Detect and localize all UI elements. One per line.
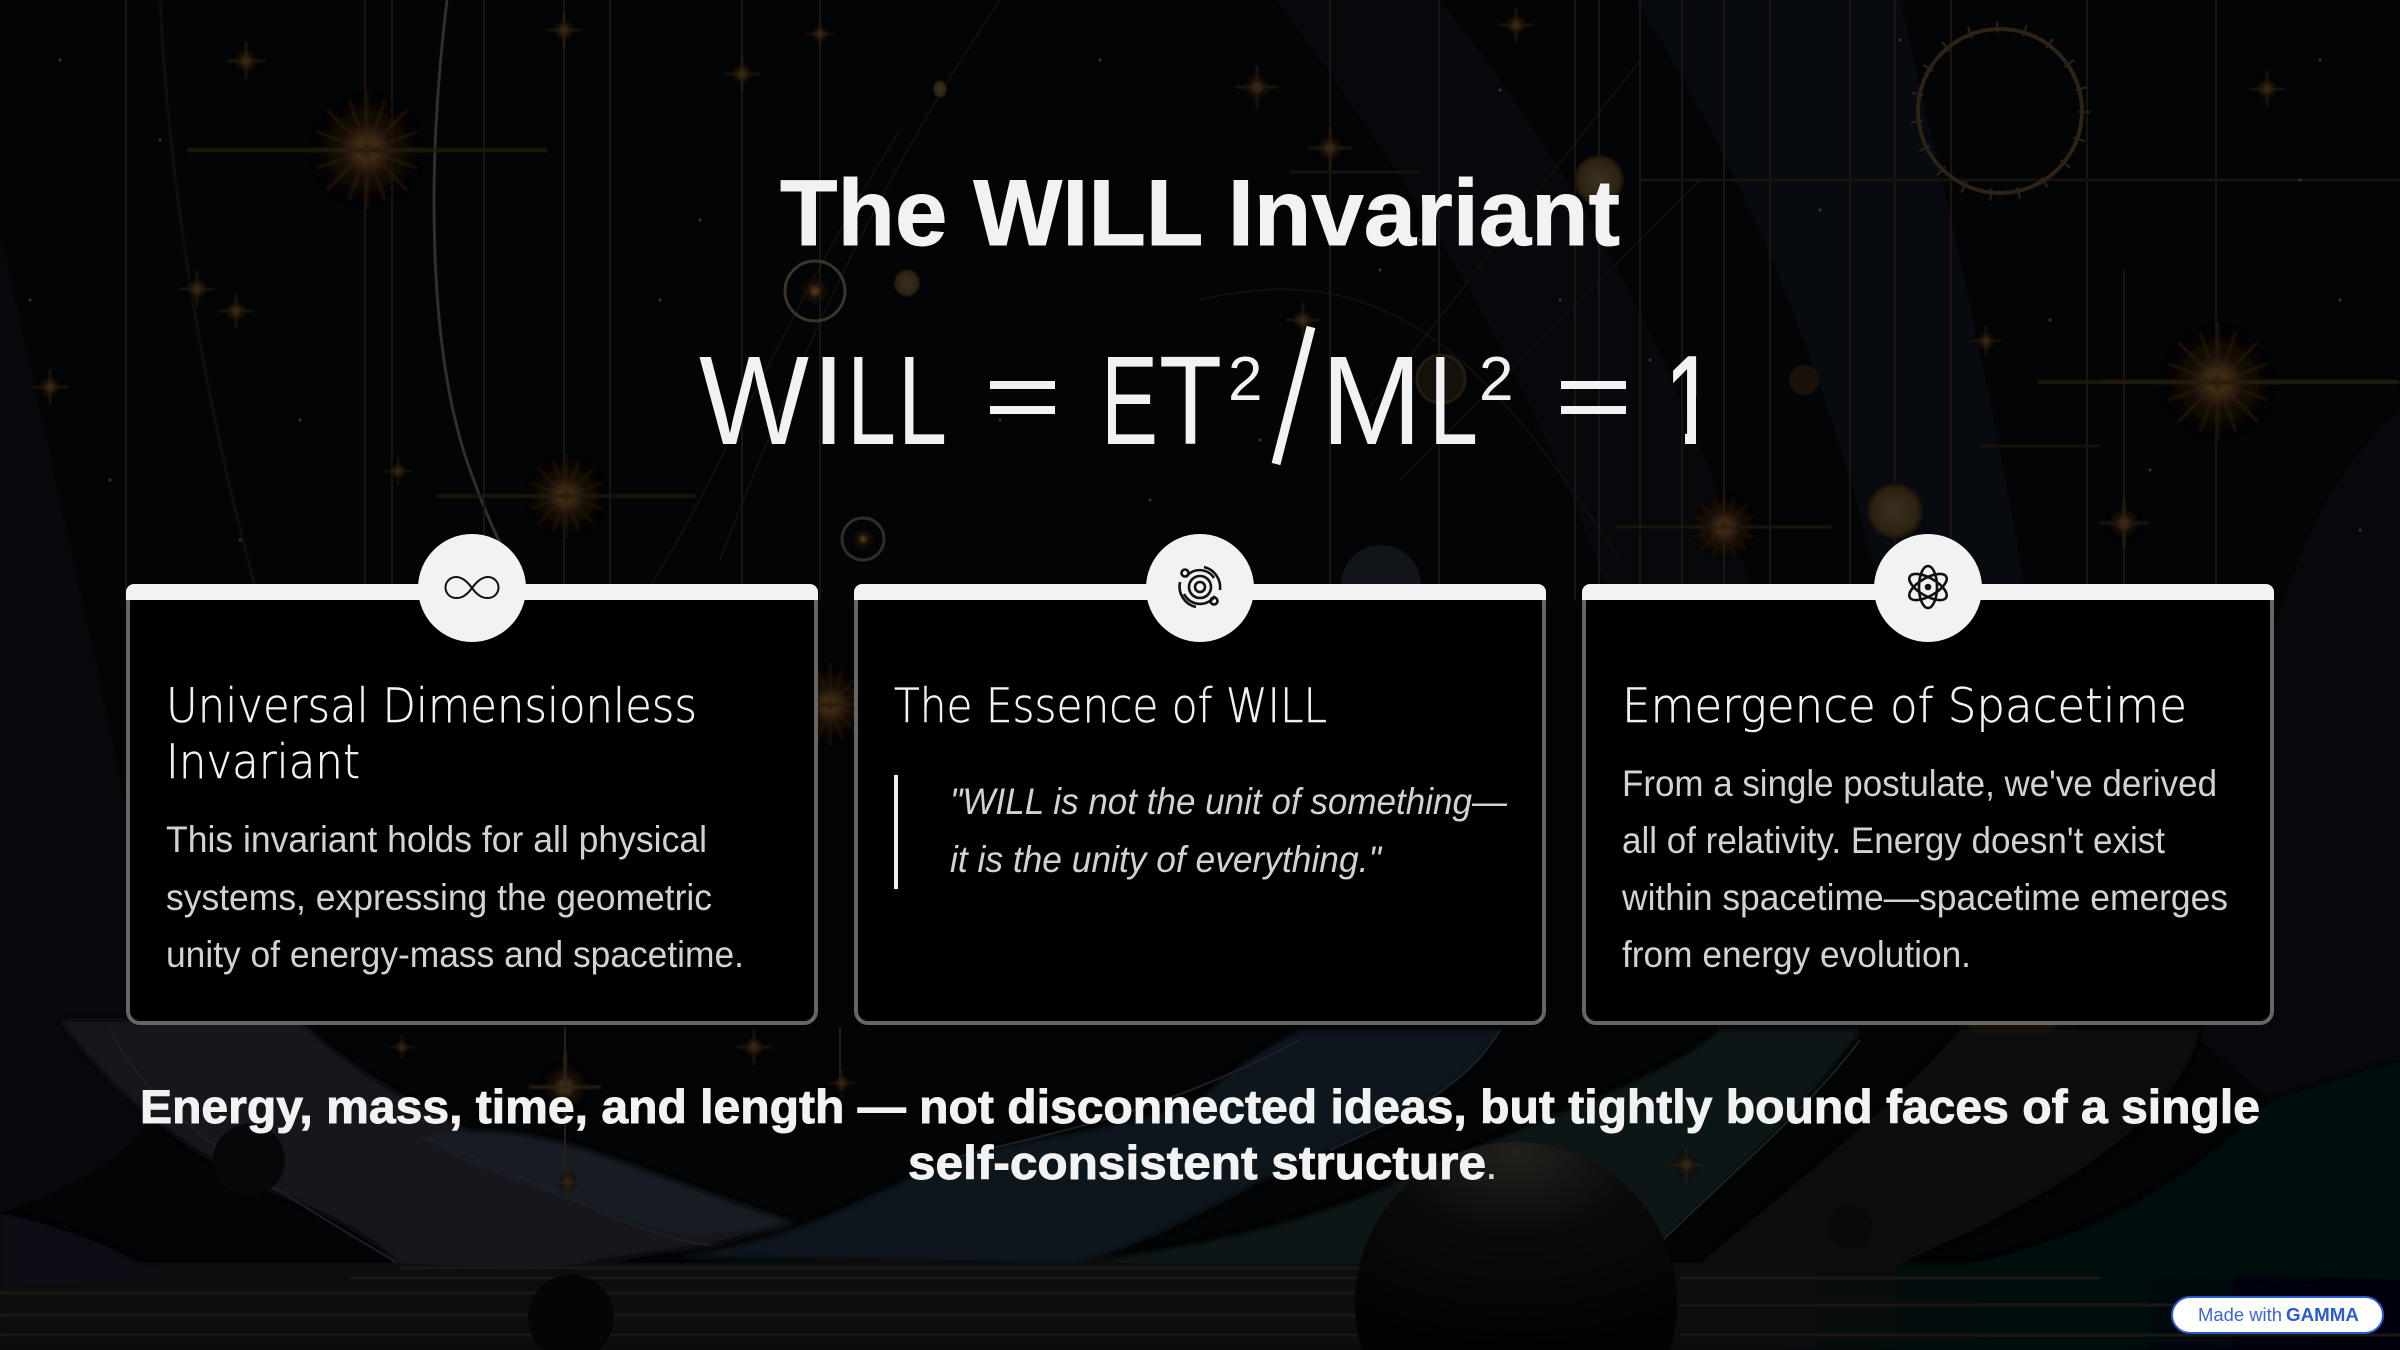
formula: 1 — [1665, 330, 1715, 471]
badge: made with gamma: Made with — [2198, 1305, 2282, 1325]
card body: all of relativity. Energy doesn't exist — [1622, 820, 2166, 861]
card body — [1621, 763, 2228, 975]
distant planet — [1341, 545, 1421, 625]
icon: atom — [1905, 566, 1951, 608]
dim orb below right card — [1954, 932, 2070, 1048]
formula: M — [1321, 330, 1422, 471]
badge: made with gamma — [2172, 1297, 2383, 1333]
card body: This invariant holds for all physical — [166, 819, 707, 860]
card body — [166, 819, 744, 975]
formula: L — [1429, 330, 1478, 471]
formula: 2 — [1479, 345, 1513, 414]
closing statement: self-consistent structure — [908, 1136, 1486, 1189]
formula: T — [1159, 330, 1222, 471]
card heading: Emergence of Spacetime — [1622, 679, 2187, 734]
formula — [699, 327, 1715, 471]
icon: orbit — [1180, 567, 1220, 607]
foreground spheres — [1355, 1142, 1677, 1350]
card heading — [166, 679, 697, 790]
closing statement: . — [1485, 1137, 1498, 1189]
formula: E — [1101, 330, 1158, 471]
card body: unity of energy-mass and spacetime. — [166, 934, 744, 975]
formula: L — [847, 330, 896, 471]
card body: systems, expressing the geometric — [166, 877, 712, 918]
quote — [950, 781, 1508, 880]
closing statement — [140, 1080, 2260, 1189]
icon: infinity — [446, 577, 499, 598]
quote: "WILL is not the unit of something— — [950, 781, 1508, 822]
formula: I — [811, 330, 846, 471]
card body: within spacetime—spacetime emerges — [1621, 877, 2228, 918]
quote: it is the unity of everything." — [950, 839, 1383, 880]
card body: From a single postulate, we've derived — [1622, 763, 2217, 804]
bottom mountains — [0, 1020, 2400, 1350]
closing statement: Energy, mass, time, and length — not disconnected ideas, but tightly bound faces of a single — [140, 1080, 2260, 1133]
stardust — [30, 40, 2360, 540]
badge: made with gamma: GAMMA — [2286, 1305, 2359, 1325]
panel: universal dimensionless invariant — [126, 534, 818, 1023]
formula: W — [699, 330, 809, 471]
card body: from energy evolution. — [1622, 934, 1971, 975]
panel: emergence of spacetime — [1582, 534, 2274, 1023]
quote bar — [894, 775, 898, 889]
formula: 2 — [1228, 345, 1262, 414]
formula: L — [898, 330, 947, 471]
panel: the essence of will — [854, 534, 1546, 1023]
card heading: Universal Dimensionless — [166, 679, 697, 734]
title: The WILL Invariant — [780, 160, 1620, 265]
card heading: Invariant — [166, 735, 360, 790]
thorn ring top right — [1916, 27, 2084, 195]
card heading: The Essence of WILL — [894, 679, 1327, 734]
